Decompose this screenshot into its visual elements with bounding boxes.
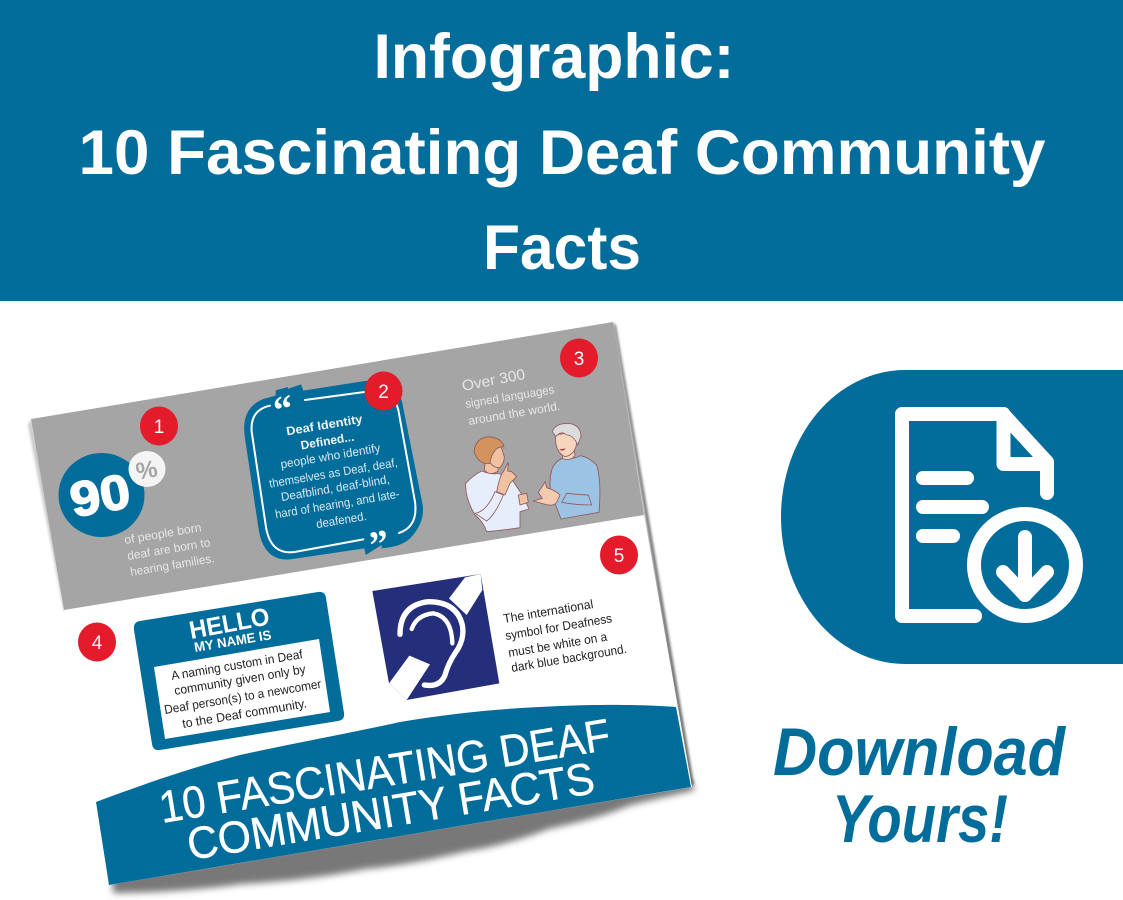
- fact 1: 90 percent: deaf are born to: [126, 535, 212, 563]
- fact 2: quote box: people who identify: [279, 441, 381, 471]
- fact 5: deafness symbol: must be white on a: [507, 630, 608, 660]
- fact 2: quote box: Deaf Identity: [285, 412, 364, 438]
- fact 4: name tag: A naming custom in Deaf: [170, 647, 304, 683]
- badge 4: 4: [92, 633, 103, 654]
- badge 5: [600, 536, 638, 574]
- fact 5: deafness symbol: dark blue background.: [510, 642, 628, 675]
- badge 2: 2: [378, 382, 389, 403]
- title text: Infographic:: [374, 22, 734, 92]
- badge 3: 3: [574, 349, 584, 370]
- call to action: Yours!: [832, 781, 1008, 857]
- blue bottom banner: [96, 705, 691, 885]
- sheet banner title: COMMUNITY FACTS: [183, 752, 598, 870]
- title text: 10 Fascinating Deaf Community: [78, 118, 1046, 188]
- fact 5: deafness symbol: symbol for Deafness: [504, 611, 613, 643]
- right person: [550, 456, 600, 519]
- badge 3: [560, 338, 598, 378]
- fact 5: deafness symbol: The international: [502, 597, 594, 626]
- sheet banner title: 10 FASCINATING DEAF: [155, 709, 614, 833]
- fact 2: quote box: ”: [366, 522, 393, 567]
- icon: document download: [902, 414, 1076, 616]
- fact 3: signed languages: signed languages: [464, 382, 555, 411]
- title banner: [0, 0, 1123, 301]
- badge 4: [78, 622, 116, 662]
- fact 4: name tag: HELLO: [187, 603, 272, 645]
- fact 4: name tag: Deaf person(s) to a newcomer: [163, 677, 322, 717]
- fact 2: quote box: hard of hearing, and late-: [274, 487, 401, 521]
- fact 3: signed languages: around the world.: [467, 399, 561, 428]
- fact 1: 90 percent: [58, 406, 215, 579]
- fact 2: quote box: [244, 372, 423, 567]
- fact 5: deafness symbol: [372, 536, 638, 700]
- fact 4: name tag: MY NAME IS: [193, 627, 272, 655]
- fact 4: name tag: [78, 592, 344, 750]
- call to action: Download: [773, 714, 1066, 790]
- fact 1: 90 percent: 90: [66, 464, 134, 528]
- fact 2: quote box: themselves as Deaf, deaf,: [268, 455, 399, 491]
- fact 2: quote box: “: [270, 387, 297, 432]
- fact 2: quote box: Deafblind, deaf-blind,: [280, 472, 391, 504]
- fact 3: signed languages: Over 300: [461, 366, 527, 395]
- tilted infographic sheet preview: [28, 322, 695, 893]
- badge 1: [140, 406, 178, 446]
- title text: [78, 22, 1046, 283]
- badge 1: 1: [154, 417, 164, 438]
- fact 1: 90 percent: %: [134, 455, 160, 486]
- illustration: two people signing: [466, 423, 600, 532]
- left person: [466, 471, 529, 532]
- fact 4: name tag: to the Deaf community.: [181, 696, 308, 731]
- icon: ear symbol: [372, 574, 499, 700]
- sheet white base: [64, 515, 692, 885]
- download panel: [781, 370, 1123, 664]
- fact 1: 90 percent: hearing families.: [129, 551, 215, 579]
- call to action: [773, 714, 1066, 857]
- fact 2: quote box: Defined...: [300, 430, 355, 452]
- gray upper section: [31, 322, 644, 610]
- fact 2: quote box: deafened.: [315, 509, 368, 531]
- fact 1: 90 percent: of people born: [123, 520, 202, 547]
- fact 4: name tag: community given only by: [173, 662, 307, 698]
- badge 2: [364, 372, 402, 410]
- badge 5: 5: [614, 546, 624, 567]
- sheet shadow: [112, 780, 695, 893]
- fact 3: signed languages: [461, 338, 600, 532]
- title text: Facts: [483, 213, 641, 283]
